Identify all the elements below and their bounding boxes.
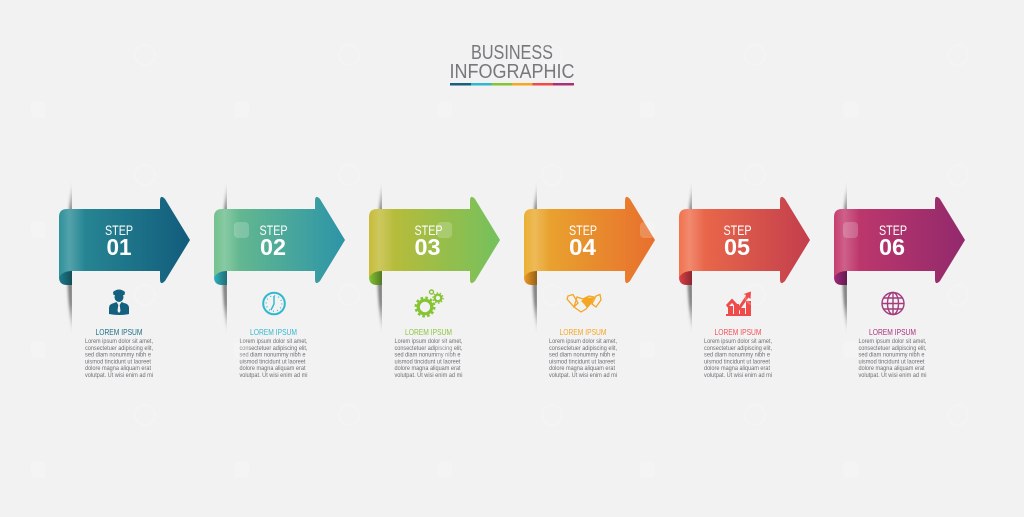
body text: dolore magna aliquam erat — [858, 366, 925, 372]
panel: step 6 — [834, 180, 965, 379]
body text: sed diam nonummy nibh e — [858, 353, 925, 359]
body text: dolore magna aliquam erat — [549, 366, 615, 372]
body text: dolore magna aliquam erat — [704, 366, 770, 372]
body text: consectetuer adipiscing elit, — [85, 346, 153, 352]
body text: dolore magna aliquam erat — [394, 366, 461, 372]
step label: STEP — [105, 222, 133, 238]
heading: LOREM IPSUM — [714, 327, 762, 337]
heading: LOREM IPSUM — [869, 327, 916, 337]
body text: sed diam nonummy nibh e — [394, 353, 461, 359]
arrow — [679, 197, 810, 283]
body text: volutpat. Ut wisi enim ad mi — [394, 373, 462, 379]
title colour bar — [450, 83, 574, 86]
body text: Lorem ipsum dolor sit amet, — [858, 339, 927, 345]
step label: STEP — [569, 222, 597, 238]
body text: uismod tincidunt ut laoreet — [704, 359, 770, 365]
step number: 03 — [414, 234, 440, 260]
body text: sed diam nonummy nibh e — [85, 353, 152, 359]
arrow — [214, 197, 345, 283]
body text: Lorem ipsum dolor sit amet, — [704, 339, 772, 345]
body text: sed diam nonummy nibh e — [240, 353, 306, 359]
step number: 06 — [879, 234, 905, 260]
body text: sed diam nonummy nibh e — [704, 353, 771, 359]
body text — [85, 339, 153, 379]
body text — [704, 339, 772, 379]
ribbon fold — [214, 271, 227, 285]
body text: Lorem ipsum dolor sit amet, — [240, 339, 308, 345]
body text — [549, 339, 617, 379]
arrow — [524, 197, 655, 283]
body text: consectetuer adipiscing elit, — [240, 346, 308, 352]
ribbon fold — [524, 271, 537, 285]
body text: consectetuer adipiscing elit, — [858, 346, 927, 352]
heading: LOREM IPSUM — [96, 327, 142, 337]
body text: Lorem ipsum dolor sit amet, — [549, 339, 617, 345]
body text: uismod tincidunt ut laoreet — [85, 359, 151, 365]
body text: uismod tincidunt ut laoreet — [394, 359, 461, 365]
panel: step 1 — [59, 180, 190, 379]
panel: step 4 — [524, 180, 655, 379]
icon: growth chart — [726, 292, 751, 316]
title: INFOGRAPHIC — [450, 61, 574, 83]
body text: uismod tincidunt ut laoreet — [240, 359, 306, 365]
body text: Lorem ipsum dolor sit amet, — [394, 339, 463, 345]
ribbon fold — [369, 271, 382, 285]
body text: volutpat. Ut wisi enim ad mi — [549, 373, 617, 379]
panel: step 3 — [369, 180, 500, 379]
body text: volutpat. Ut wisi enim ad mi — [240, 373, 308, 379]
step number: 05 — [724, 234, 750, 260]
body text: volutpat. Ut wisi enim ad mi — [704, 373, 772, 379]
title — [450, 42, 574, 83]
body text: consectetuer adipiscing elit, — [394, 346, 463, 352]
body text: sed diam nonummy nibh e — [549, 353, 616, 359]
step label: STEP — [879, 222, 907, 238]
body text: uismod tincidunt ut laoreet — [549, 359, 615, 365]
heading: LOREM IPSUM — [250, 327, 297, 337]
body text: uismod tincidunt ut laoreet — [858, 359, 925, 365]
step number: 01 — [106, 234, 132, 260]
ribbon fold — [834, 271, 847, 285]
heading: LOREM IPSUM — [405, 327, 452, 337]
body text: volutpat. Ut wisi enim ad mi — [858, 373, 926, 379]
ribbon fold — [679, 271, 692, 285]
step label: STEP — [414, 222, 442, 238]
body text: Lorem ipsum dolor sit amet, — [85, 339, 153, 345]
panel: step 2 — [214, 180, 345, 379]
icon: businessman — [109, 290, 129, 315]
step number: 04 — [569, 234, 596, 260]
body text — [240, 339, 308, 379]
ribbon fold — [59, 271, 72, 285]
body text — [394, 339, 463, 379]
icon: clock — [263, 293, 285, 314]
arrow — [59, 197, 190, 283]
heading: LOREM IPSUM — [560, 327, 606, 337]
body text — [858, 339, 927, 379]
arrow — [369, 197, 500, 283]
step label: STEP — [260, 222, 288, 238]
body text: dolore magna aliquam erat — [85, 366, 151, 372]
title: BUSINESS — [471, 42, 553, 64]
step number: 02 — [260, 234, 286, 260]
arrow — [834, 197, 965, 283]
body text: volutpat. Ut wisi enim ad mi — [85, 373, 153, 379]
step label: STEP — [724, 222, 752, 238]
icon: gears — [416, 290, 443, 316]
icon: globe — [882, 292, 904, 314]
body text: consectetuer adipiscing elit, — [704, 346, 772, 352]
icon: handshake — [567, 294, 601, 312]
panel: step 5 — [679, 180, 810, 379]
body text: dolore magna aliquam erat — [240, 366, 306, 372]
body text: consectetuer adipiscing elit, — [549, 346, 617, 352]
